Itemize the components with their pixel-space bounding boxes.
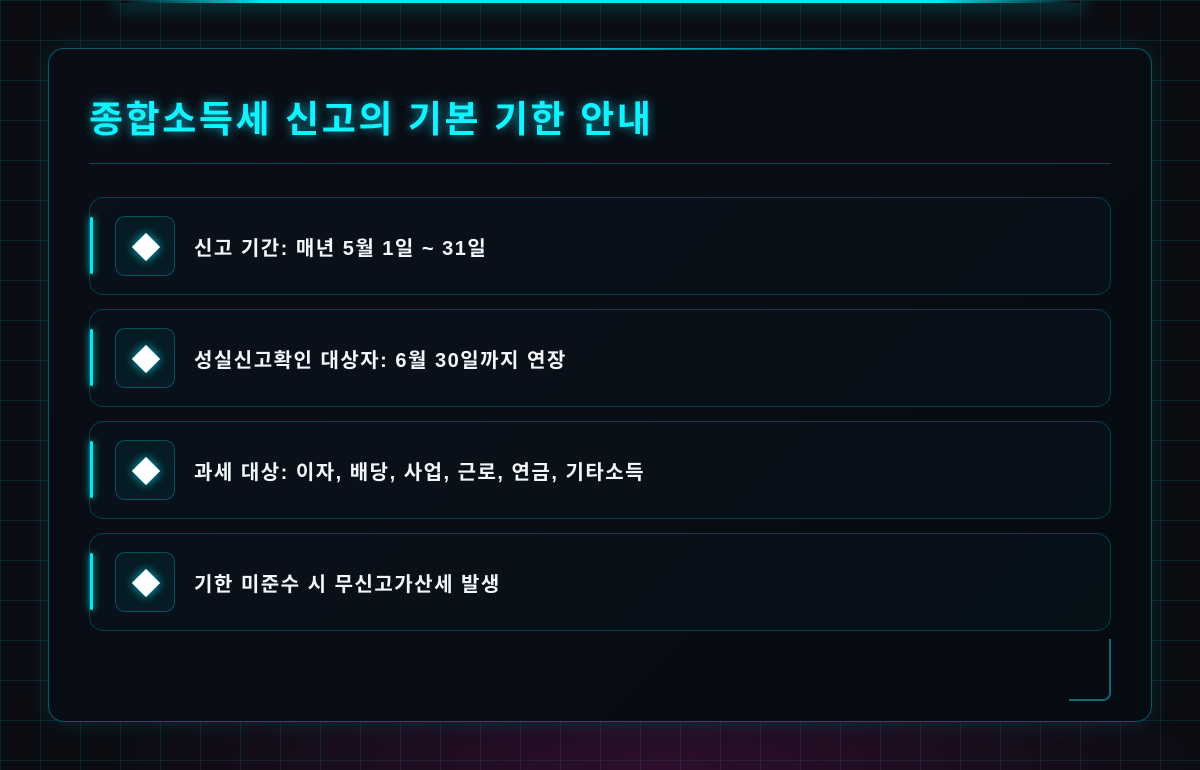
- item: taxable income: [89, 421, 1111, 519]
- item: extension: 성실신고확인 대상자: 6월 30일까지 연장: [194, 350, 567, 372]
- item: extension: [89, 309, 1111, 407]
- item: penalty: 기한 미준수 시 무신고가산세 발생: [194, 574, 501, 596]
- item: taxable income: 과세 대상: 이자, 배당, 사업, 근로, 연금, 기타소득: [194, 462, 645, 484]
- item: penalty: [89, 533, 1111, 631]
- item: filing period: 신고 기간: 매년 5월 1일 ~ 31일: [194, 238, 487, 260]
- title: 종합소득세 신고의 기본 기한 안내: [89, 99, 653, 140]
- item: filing period: [89, 197, 1111, 295]
